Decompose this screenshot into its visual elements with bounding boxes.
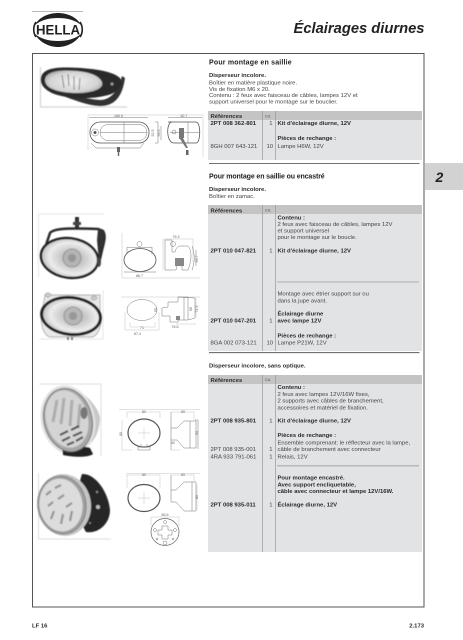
logo: HELLA: HELLA bbox=[36, 22, 80, 38]
table 2 rows: pour le montage sur le boucle. bbox=[278, 235, 357, 241]
text block: section 1: support universel pour le montage sur le bouclier. bbox=[209, 100, 338, 106]
diagram: recessed lamp dimensions: 80 bbox=[142, 473, 146, 477]
table 3 rows bbox=[210, 378, 410, 508]
table 1 rows: 2PT 008 362-801 bbox=[210, 121, 257, 127]
diagram: oval lamp with plate dimensions bbox=[121, 297, 200, 336]
diagram: round lamp dimensions: 80 bbox=[181, 410, 185, 414]
table 2 rows: Montage avec étrier support sur ou bbox=[278, 292, 369, 298]
table 3 rows: Éclairage diurne, 12V bbox=[278, 500, 337, 508]
diagram: oval lamp with plate dimensions: 55 bbox=[154, 308, 158, 312]
diagram: round lamp dimensions: 60 bbox=[171, 441, 175, 445]
panel: table 3 background bbox=[208, 375, 422, 552]
table 2 rows: Contenu : bbox=[278, 216, 305, 222]
logo: HELLA bbox=[32, 12, 83, 47]
table 2 rows bbox=[210, 208, 393, 346]
section rules bbox=[209, 164, 420, 353]
diagram: recessed lamp dimensions bbox=[126, 473, 200, 546]
text block: section 1: Boîtier en matière plastique noire. bbox=[209, 80, 297, 86]
text block: section 1: Vis de fixation M6 x 20. bbox=[209, 87, 270, 93]
table 2 rows: Éclairage diurne bbox=[278, 310, 324, 318]
diagram: oval lamp dimensions: 59.7 bbox=[195, 256, 199, 262]
table 3 rows: 1 bbox=[269, 447, 272, 453]
table 2 rows: Kit d'éclairage diurne, 12V bbox=[278, 248, 351, 254]
table 1 rows: 1 bbox=[269, 121, 272, 127]
text block: section 1: Contenu : 2 feux avec faisceau de câbles, lampes 12V et bbox=[209, 93, 358, 99]
table 1 rows: Kit d'éclairage diurne, 12V bbox=[278, 121, 351, 127]
table 3 rows: Contenu : bbox=[278, 385, 305, 391]
table 3 rows: 4RA 933 791-061 bbox=[210, 454, 256, 460]
table 3 rows: Avec support encliquetable, bbox=[278, 482, 356, 488]
table 3 rows: Kit d'éclairage diurne, 12V bbox=[278, 418, 351, 424]
diagram: oblong lamp dimensions: 82.7 bbox=[180, 114, 188, 118]
photo: oval lamp with mounting plate bbox=[38, 290, 104, 340]
table 1 rows: Références bbox=[210, 114, 243, 120]
table 3 rows: 1 bbox=[269, 502, 272, 508]
diagram: oval lamp dimensions: 76.3 bbox=[172, 235, 180, 239]
table 2 rows: Pièces de rechange : bbox=[278, 334, 336, 340]
diagram: oval lamp with plate dimensions: 56 bbox=[189, 307, 193, 311]
table 1 rows bbox=[210, 114, 351, 150]
section tab: chapter 2 bbox=[425, 163, 463, 190]
table 3 rows: 1 bbox=[269, 418, 272, 424]
table 1 rows: Cd. bbox=[265, 114, 271, 118]
diagram: oblong lamp dimensions bbox=[88, 114, 203, 157]
panel: table 2 background bbox=[208, 205, 422, 351]
table 3 rows: 2PT 008 935-001 bbox=[210, 447, 256, 453]
table 3 rows: câble de branchement avec connecteur bbox=[278, 447, 381, 453]
diagram: recessed lamp dimensions: 85,5 bbox=[162, 513, 168, 517]
diagram: recessed lamp dimensions: 80 bbox=[195, 495, 199, 499]
title: Éclairages diurnes bbox=[294, 20, 424, 37]
table 2 rows: 10 bbox=[266, 340, 274, 346]
table 3 rows: accessoires et matériel de fixation. bbox=[278, 406, 368, 412]
table 1 rows: Lampe H6W, 12V bbox=[278, 144, 324, 150]
table 3 rows: Pour montage encastré. bbox=[278, 476, 345, 482]
diagram: round lamp dimensions: 55 bbox=[195, 431, 199, 435]
diagram: oblong lamp dimensions: 185.5 bbox=[114, 114, 123, 118]
diagram: oblong lamp dimensions: 59.5 bbox=[157, 130, 161, 136]
table 2 rows: 1 bbox=[269, 248, 272, 254]
section tab: chapter 2: 2 bbox=[434, 169, 444, 185]
text block: section 1 bbox=[209, 60, 358, 106]
table 3 rows: Références bbox=[210, 378, 243, 384]
table 2 rows: Lampe P21W, 12V bbox=[278, 340, 327, 346]
table 2 rows: 8GA 002 073-121 bbox=[210, 340, 257, 346]
text block: section 2: Boîtier en zamac. bbox=[209, 194, 255, 200]
text block: section 1: Pour montage en saillie bbox=[209, 60, 292, 66]
text block: section 2: Pour montage en saillie ou encastré bbox=[209, 174, 325, 180]
text block: section 1: Disperseur incolore. bbox=[209, 73, 266, 79]
table 2 rows: 1 bbox=[269, 318, 272, 324]
table 3 rows: Relais, 12V bbox=[278, 454, 308, 460]
diagram: round lamp dimensions: 80 bbox=[142, 410, 146, 414]
table 3 rows: 2PT 008 935-801 bbox=[210, 418, 257, 424]
table 2 rows: Cd. bbox=[265, 208, 271, 212]
footer: page number: 2.173 bbox=[409, 624, 425, 630]
diagram: oval lamp dimensions: 86.7 bbox=[136, 274, 143, 278]
table 3 rows: Ensemble comprenant: le réflecteur avec la lampe, bbox=[278, 440, 410, 446]
table 3 rows: Cd. bbox=[265, 378, 271, 382]
table 3 rows: 2PT 008 935-011 bbox=[210, 502, 256, 508]
photo: oval lamp with top bracket bbox=[37, 214, 105, 283]
table 1 rows: 8GH 007 643-121 bbox=[210, 144, 257, 150]
footer: left code: LF 16 bbox=[32, 624, 48, 630]
table 2 rows: 2PT 010 047-201 bbox=[210, 318, 257, 324]
table 3 rows: 2 supports avec câbles de branchement, bbox=[278, 398, 384, 404]
table 1 rows: 10 bbox=[266, 144, 274, 150]
table 3 rows: 2 feux avec lampes 12V/16W fixes, bbox=[278, 392, 370, 398]
photo: oblong surface-mounted lamp bbox=[40, 67, 127, 107]
text block: section 3: Disperseur incolore, sans optique. bbox=[209, 364, 306, 370]
photo: round recessed lamp with black housing bbox=[33, 471, 111, 539]
diagram: oval lamp with plate dimensions: 71,5 bbox=[195, 306, 199, 312]
diagram: recessed lamp dimensions: 60 bbox=[181, 473, 185, 477]
table 2 rows: 2PT 010 047-821 bbox=[210, 248, 257, 254]
diagram: oval lamp with plate dimensions: 87.4 bbox=[134, 332, 141, 336]
diagram: oval lamp with plate dimensions: 71 bbox=[140, 326, 144, 330]
table 3 rows: câble avec connecteur et lampe 12V/16W. bbox=[278, 489, 394, 495]
table 2 rows: Références bbox=[210, 208, 243, 214]
table 3 rows: Pièces de rechange : bbox=[278, 433, 336, 439]
table 3 rows: 1 bbox=[269, 454, 272, 460]
table 1 rows: Pièces de rechange : bbox=[278, 136, 336, 142]
diagram: oval lamp dimensions bbox=[122, 233, 200, 278]
text block: section 2: Disperseur incolore. bbox=[209, 187, 266, 193]
diagram: oblong lamp dimensions: 52.5 bbox=[151, 130, 155, 136]
panel: table 1 background bbox=[208, 111, 422, 160]
photo: round chrome lamp bbox=[33, 380, 103, 460]
table 2 rows: 2 feux avec faisceau de câbles, lampes 12V bbox=[278, 222, 393, 228]
diagram: round lamp dimensions bbox=[119, 410, 200, 450]
diagram: round lamp dimensions: 80 bbox=[119, 432, 123, 436]
text block: section 2 bbox=[209, 174, 325, 200]
diagram: oval lamp with plate dimensions: 76,8 bbox=[172, 325, 178, 329]
table 2 rows: et support universel bbox=[278, 228, 329, 234]
table 2 rows: avec lampe 12V bbox=[278, 318, 321, 324]
table 2 rows: dans la jupe avant. bbox=[278, 298, 327, 304]
page frame bbox=[32, 54, 424, 607]
